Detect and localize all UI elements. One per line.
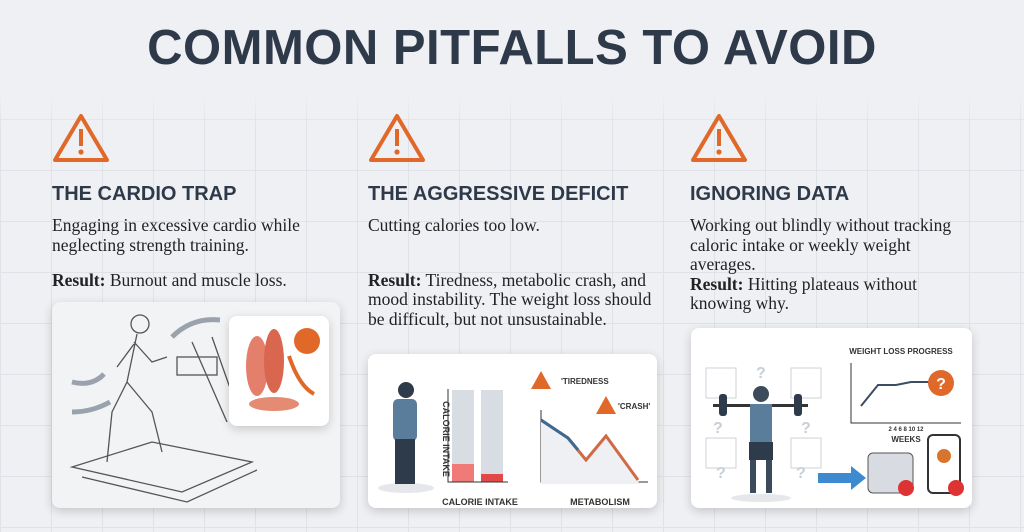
panel: ignoring data <box>690 114 951 313</box>
card: data illustration: ? <box>801 420 811 437</box>
title: COMMON PITFALLS TO AVOID <box>147 21 877 75</box>
card: data illustration: ? <box>716 465 726 482</box>
text: Engaging in excessive cardio while neglecting strength training. <box>52 215 300 254</box>
card: deficit charts: METABOLISM <box>570 497 630 507</box>
card: deficit charts: CALORIE INTAKE <box>442 497 518 507</box>
text: Result: Burnout and muscle loss. <box>52 270 287 290</box>
heading: THE CARDIO TRAP <box>52 183 236 205</box>
card: data illustration: ? <box>796 465 806 482</box>
card: data illustration: ? <box>713 420 723 437</box>
heading: THE AGGRESSIVE DEFICIT <box>368 183 628 205</box>
inset: muscle <box>229 316 329 426</box>
card: deficit charts: 'CRASH' <box>618 402 650 411</box>
card: deficit charts <box>368 354 657 508</box>
card: data illustration: 2 4 6 8 10 12 <box>888 427 924 433</box>
card: data illustration <box>691 328 972 508</box>
heading: IGNORING DATA <box>690 183 849 205</box>
card: data illustration: ? <box>756 365 766 382</box>
text: Cutting calories too low. Result: Tiredness, metabolic crash, and mood instability. The weight loss should be difficult, but not unsustainable. <box>368 215 651 328</box>
panel: aggressive deficit <box>368 114 652 328</box>
card: data illustration: WEIGHT LOSS PROGRESS <box>849 347 953 356</box>
text <box>690 215 951 313</box>
text: Result: Hitting plateaus without knowing why. <box>690 274 917 313</box>
panel: cardio trap <box>52 114 300 290</box>
icon: warning <box>53 114 110 162</box>
icon: warning <box>691 114 748 162</box>
card: data illustration: WEEKS <box>891 435 921 444</box>
card: deficit charts: CALORIE INTAKE <box>441 401 451 477</box>
icon: warning <box>369 114 426 162</box>
card: treadmill illustration <box>52 302 340 508</box>
text <box>52 215 300 290</box>
text: Working out blindly without tracking caloric intake or weekly weight averages. <box>690 215 951 274</box>
card: deficit charts: 'TIREDNESS <box>561 377 609 386</box>
card: data illustration: ? <box>936 376 946 393</box>
